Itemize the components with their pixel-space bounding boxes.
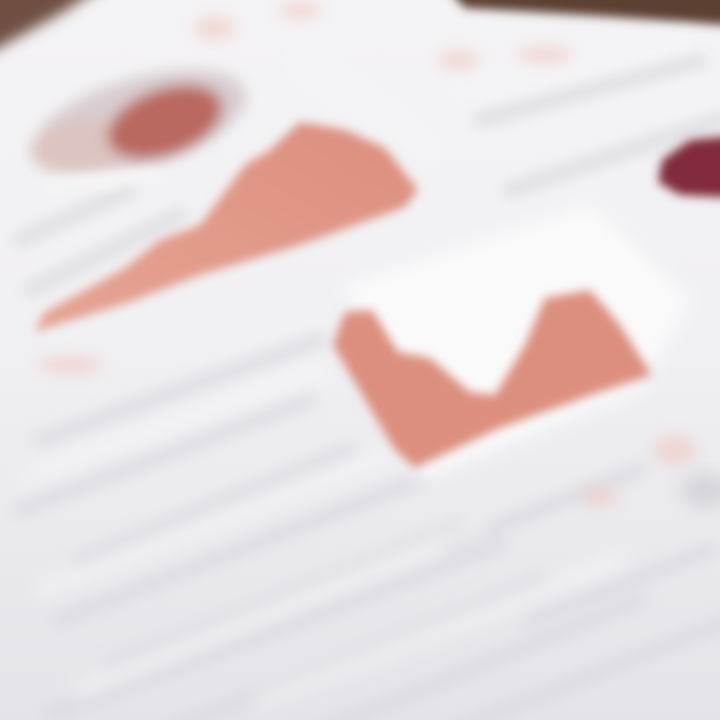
- oval reddish fill: [97, 70, 233, 174]
- dark red object at right edge: [658, 135, 720, 198]
- faint mark top: [280, 1, 320, 19]
- faint mark top centre: [195, 16, 235, 40]
- grey smudge right edge: [681, 472, 720, 508]
- faint mark lower right: [582, 487, 618, 507]
- faint mark left: [38, 356, 102, 374]
- faint mark upper middle: [438, 50, 478, 70]
- wooden table: top right edge: [440, 0, 720, 26]
- wooden table: top left corner: [0, 0, 112, 58]
- oval grey rim: [22, 49, 258, 195]
- right salmon chart with notch: [333, 290, 652, 468]
- oval light base: [27, 112, 133, 180]
- blurred oval chart top left: [22, 49, 258, 195]
- faint mark right: [653, 435, 697, 465]
- large salmon area chart: [34, 122, 418, 332]
- faint pink marks: [38, 1, 697, 507]
- white sheen below the oval: [45, 167, 165, 193]
- white panel behind the right chart: [345, 205, 690, 480]
- faint mark upper right: [517, 46, 573, 64]
